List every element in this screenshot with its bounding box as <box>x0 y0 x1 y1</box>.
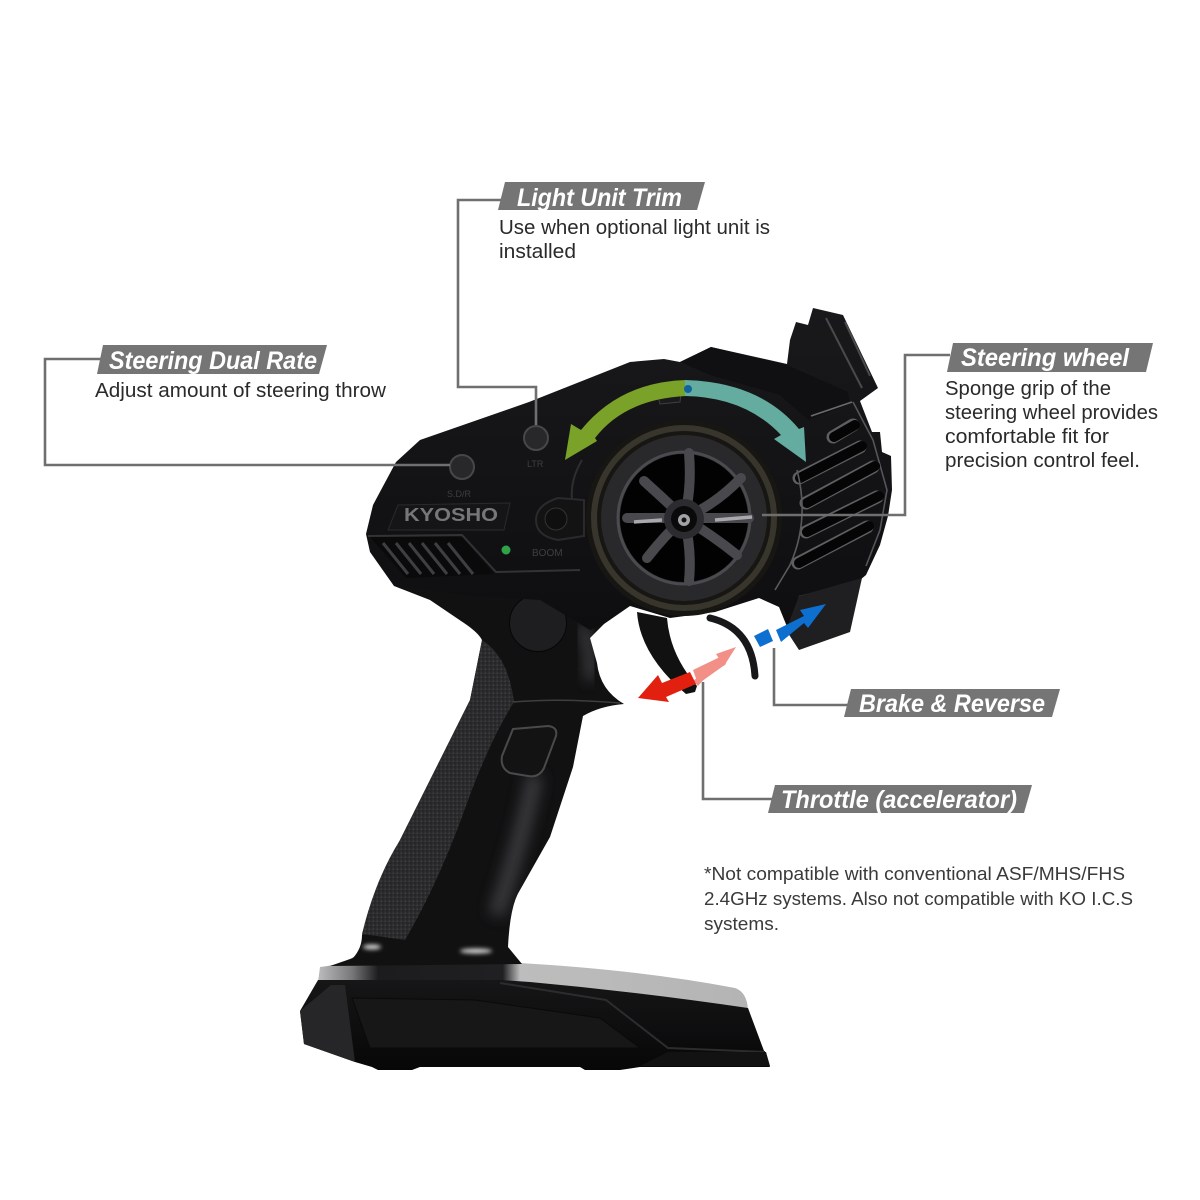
icon: centre dot <box>684 385 692 393</box>
text: light unit trim description: Use when optional light unit is <box>499 217 770 239</box>
heading: Steering wheel: Steering wheel <box>961 344 1130 372</box>
text: steering wheel description: precision control feel. <box>945 450 1140 472</box>
lower right housing <box>786 578 862 650</box>
footnote: 2.4GHz systems. Also not compatible with KO I.C.S <box>704 889 1133 909</box>
icon: teal steering arrow right <box>685 380 806 462</box>
callout line: throttle <box>703 682 775 799</box>
text: steering dual rate description: Adjust amount of steering throw <box>95 380 387 402</box>
front vent grille <box>368 535 580 578</box>
heading: Throttle (accelerator): Throttle (accelerator) <box>781 786 1017 814</box>
Kyosho logo plate: KYOSHO <box>404 505 498 525</box>
text: steering wheel description: comfortable fit for <box>945 426 1109 448</box>
ventilation slots <box>798 425 879 563</box>
text: light unit trim description: installed <box>499 241 576 263</box>
power LED <box>502 546 510 554</box>
dual rate knob <box>447 455 474 499</box>
icon: green steering arrow left <box>565 380 686 460</box>
text: steering wheel description: steering wheel provides <box>945 402 1158 424</box>
textured rear grip <box>362 640 514 940</box>
callout line: light unit trim <box>458 200 536 425</box>
trim knob: LTR <box>527 459 544 469</box>
steering wheel <box>586 420 782 616</box>
bind button <box>532 498 584 559</box>
neck ring highlights <box>363 944 492 954</box>
heading: Steering Dual Rate: Steering Dual Rate <box>109 347 317 375</box>
icon: red throttle arrow <box>638 647 736 702</box>
heading: Light Unit Trim: Light Unit Trim <box>517 184 682 212</box>
Kyosho logo plate <box>388 503 510 530</box>
callout line: steering wheel <box>762 355 950 515</box>
main body <box>366 308 892 634</box>
top trim dial <box>655 385 682 404</box>
callout line: brake and reverse <box>774 648 850 705</box>
callout line: steering dual rate <box>45 359 450 465</box>
transmitter <box>300 308 892 1070</box>
round grip patch <box>510 594 566 652</box>
grip <box>330 586 624 966</box>
grip highlights <box>496 625 590 915</box>
heading: Brake & Reverse: Brake & Reverse <box>859 690 1045 718</box>
text: steering wheel description: Sponge grip of the <box>945 378 1111 400</box>
throttle and brake triggers <box>637 612 755 694</box>
dual rate knob: S.D/R <box>447 489 472 499</box>
bind button: BOOM <box>532 548 563 559</box>
footnote: *Not compatible with conventional ASF/MHS/FHS <box>704 864 1125 884</box>
icon: blue brake arrow <box>754 604 826 647</box>
top bracket highlights <box>572 318 887 566</box>
trim knob <box>524 426 548 469</box>
footnote: systems. <box>704 914 779 934</box>
grip button <box>502 726 556 776</box>
base stand <box>300 950 770 1070</box>
